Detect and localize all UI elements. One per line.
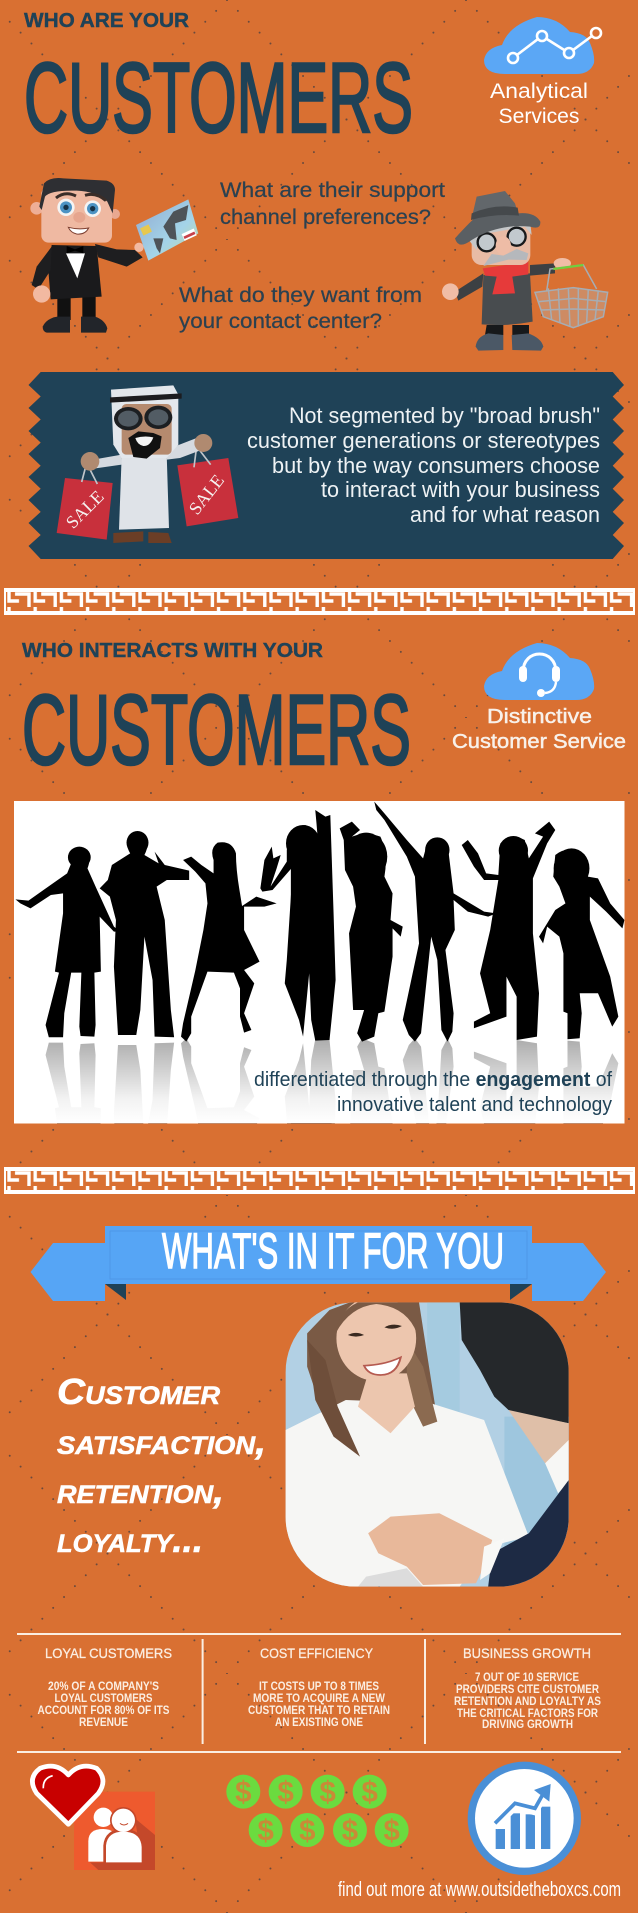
title: customers: CUSTOMERS bbox=[24, 42, 413, 153]
silhouettes of dancing people with reflection bbox=[16, 802, 624, 1124]
banner: what's in it for you bbox=[30, 1223, 606, 1301]
handwritten statement: satisfaction retention loyalty: Customer bbox=[57, 1371, 220, 1412]
bag label: sale: SALE bbox=[62, 486, 108, 532]
handwritten statement: satisfaction retention loyalty: satisfaction, bbox=[57, 1421, 266, 1462]
label: services: Services bbox=[498, 105, 580, 128]
stat column: loyal customers bbox=[38, 1645, 172, 1729]
panel: segmentation message bbox=[28, 372, 624, 559]
panel: silhouettes image bbox=[14, 801, 624, 1124]
question: support channel preferences: channel preferences? bbox=[220, 205, 431, 229]
stat column: loyal customers: 20% OF A COMPANY'S bbox=[48, 1681, 159, 1693]
stat column: cost efficiency: COST EFFICIENCY bbox=[260, 1645, 374, 1661]
question: what they want from contact center: What do they want from bbox=[179, 283, 422, 307]
character: man in tuxedo with credit card bbox=[30, 178, 198, 333]
icon: dollar coins: $ bbox=[361, 1776, 378, 1809]
divider: greek key border bbox=[4, 588, 635, 615]
text: not segmented statement: but by the way consumers choose bbox=[272, 453, 600, 478]
icon: dollar coins: $ bbox=[235, 1776, 251, 1809]
bag label: sale: SALE bbox=[185, 471, 228, 518]
handwritten statement: satisfaction retention loyalty: retention, bbox=[57, 1470, 224, 1511]
stat column: loyal customers: ACCOUNT FOR 80% OF ITS bbox=[38, 1705, 170, 1717]
stat column: business growth bbox=[454, 1645, 601, 1731]
icon: dollar coins: $ bbox=[342, 1814, 358, 1847]
stats table frame bbox=[17, 1634, 621, 1752]
icon: dollar coins: $ bbox=[383, 1814, 400, 1847]
heading: who are your: WHO ARE YOUR bbox=[24, 10, 190, 32]
label: distinctive customer service bbox=[452, 705, 626, 753]
stat column: business growth: PROVIDERS CITE CUSTOMER bbox=[456, 1684, 600, 1696]
stat column: loyal customers: REVENUE bbox=[79, 1717, 128, 1729]
icon: dollar coins: $ bbox=[277, 1776, 294, 1809]
text: not segmented statement: to interact with your business bbox=[321, 477, 600, 502]
stat column: cost efficiency: MORE TO ACQUIRE A NEW bbox=[253, 1693, 385, 1705]
text: not segmented statement: customer generations or stereotypes bbox=[247, 428, 600, 453]
label: analytical: Analytical bbox=[490, 80, 588, 103]
stat column: business growth: RETENTION AND LOYALTY AS bbox=[454, 1696, 601, 1708]
icon: heart and customers bbox=[32, 1766, 155, 1870]
icon: analytics cloud bbox=[484, 17, 601, 74]
caption: engagement of talent and technology: innovative talent and technology bbox=[337, 1094, 612, 1116]
character: man in keffiyeh with sale bags bbox=[57, 385, 238, 543]
stat column: business growth: 7 OUT OF 10 SERVICE bbox=[475, 1672, 579, 1684]
heading: who interacts with your: WHO INTERACTS WITH YOUR bbox=[22, 640, 324, 662]
stat column: cost efficiency: CUSTOMER THAT TO RETAIN bbox=[248, 1705, 390, 1717]
stat column: cost efficiency: AN EXISTING ONE bbox=[275, 1717, 363, 1729]
handwritten statement: satisfaction retention loyalty bbox=[57, 1371, 266, 1560]
text: not segmented statement: and for what reason bbox=[410, 502, 600, 527]
image background bbox=[14, 801, 624, 1124]
character: old man with shopping basket bbox=[442, 191, 608, 351]
stat column: business growth: THE CRITICAL FACTORS FOR bbox=[457, 1708, 599, 1720]
label: distinctive customer service: Customer Service bbox=[452, 730, 626, 753]
icon: dollar coins: $ bbox=[299, 1814, 315, 1847]
caption: engagement of talent and technology bbox=[254, 1069, 612, 1116]
icon: headset cloud bbox=[484, 643, 594, 700]
question: what they want from contact center: your contact center? bbox=[179, 309, 382, 333]
stat column: cost efficiency: IT COSTS UP TO 8 TIMES bbox=[259, 1681, 379, 1693]
label: distinctive customer service: Distinctive bbox=[487, 705, 592, 728]
title: customers second: CUSTOMERS bbox=[22, 674, 411, 785]
icon: dollar coins bbox=[226, 1775, 409, 1847]
stat column: cost efficiency bbox=[248, 1645, 390, 1729]
photo: business handshake bbox=[286, 1296, 570, 1587]
handwritten statement: satisfaction retention loyalty: loyalty... bbox=[57, 1519, 203, 1560]
question: what they want from contact center bbox=[179, 283, 422, 333]
question: support channel preferences bbox=[220, 178, 445, 229]
stat column: loyal customers: LOYAL CUSTOMERS bbox=[54, 1693, 153, 1705]
divider: greek key border second bbox=[4, 1167, 635, 1194]
panel shape: zigzag banner bbox=[28, 372, 624, 559]
question: support channel preferences: What are their support bbox=[220, 178, 445, 202]
stat column: business growth: BUSINESS GROWTH bbox=[463, 1645, 591, 1661]
caption: engagement of talent and technology: differentiated through the engagement of bbox=[254, 1069, 612, 1091]
stat column: business growth: DRIVING GROWTH bbox=[482, 1719, 573, 1731]
text: not segmented statement: Not segmented by "broad brush" bbox=[289, 403, 600, 428]
stat column: loyal customers: LOYAL CUSTOMERS bbox=[45, 1645, 172, 1661]
icon: growth chart bbox=[468, 1762, 581, 1875]
icon: dollar coins: $ bbox=[257, 1814, 274, 1847]
text: not segmented statement bbox=[247, 403, 600, 527]
icon: dollar coins: $ bbox=[319, 1776, 336, 1809]
